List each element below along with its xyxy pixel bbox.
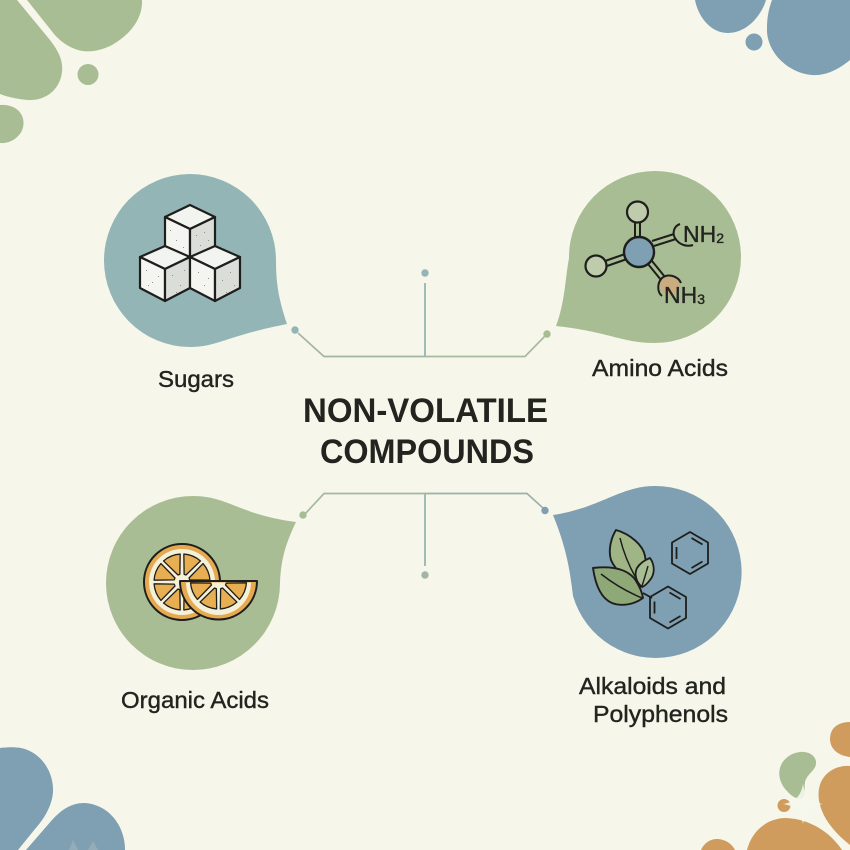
icon: citrus slices [144, 544, 257, 620]
bubble: amino acids [556, 171, 741, 343]
icon: amino acid molecule: 2 [716, 230, 724, 246]
label: alkaloids and polyphenols [579, 673, 728, 727]
bubble: organic acids [106, 496, 296, 670]
connector lines: lower [299, 493, 549, 579]
corner decoration: bottom left blue blobs [0, 747, 125, 850]
label: sugars: Sugars [158, 366, 234, 392]
label: amino acids: Amino Acids [592, 355, 728, 381]
connector lines: upper [291, 269, 551, 356]
title: NON-VOLATILE [303, 392, 548, 430]
title [303, 392, 548, 471]
icon: amino acid molecule: NH [683, 221, 716, 247]
corner decoration: bottom right orange and green blobs [701, 722, 850, 850]
corner decoration: top right blue blobs [695, 0, 850, 75]
bubble: sugars [104, 174, 287, 347]
icon: leaves and benzene rings [593, 530, 708, 628]
panel: sugars [104, 174, 287, 392]
panel: amino acids [556, 171, 741, 381]
bubble: alkaloids and polyphenols [553, 486, 742, 658]
label: alkaloids and polyphenols: Polyphenols [593, 701, 728, 727]
label: alkaloids and polyphenols: Alkaloids and [579, 673, 726, 699]
corner decoration: top left green blobs [0, 0, 142, 143]
icon: amino acid molecule [586, 202, 724, 308]
icon: sugar cubes [140, 205, 240, 301]
panel: organic acids [106, 496, 296, 713]
icon: amino acid molecule: 3 [697, 291, 705, 307]
icon: amino acid molecule: NH [664, 282, 697, 308]
panel: alkaloids and polyphenols [553, 486, 742, 727]
label: organic acids: Organic Acids [121, 687, 269, 713]
title: COMPOUNDS [320, 433, 534, 471]
